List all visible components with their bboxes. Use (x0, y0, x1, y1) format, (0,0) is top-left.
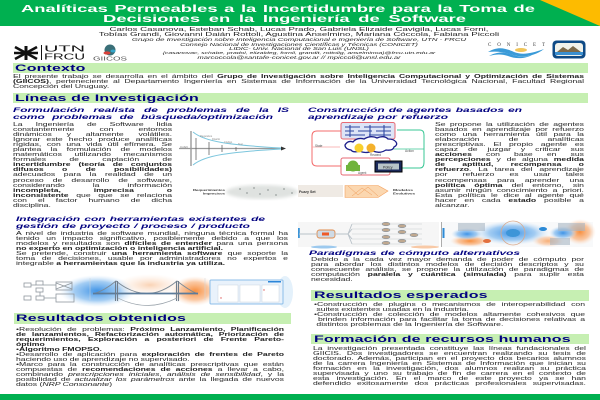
subheading: agentes (308, 107, 522, 121)
text: paradigmas: computación paralela y cuántica (simulada) para suplir esta (311, 272, 584, 278)
text: integración: no experto en optimización o inteligencia artificial. (16, 246, 223, 252)
heading: Formación de recursos humanos: Formación de recursos humanos (314, 334, 570, 344)
chart: cone of uncertainty (179, 131, 286, 166)
subheading: integración (16, 216, 265, 230)
text: formación: esta investigación. En el marco de este proyecto ya se han (313, 376, 586, 382)
illustration: abstract computing (441, 220, 595, 247)
chart: cone of uncertainty: Requisitos (200, 134, 213, 138)
illustration: bridge between models and software tool (24, 276, 293, 308)
title text: Analíticas Permeables a la Incertidumbre para la Toma de (21, 3, 535, 15)
figure: imprecise requirements (193, 184, 298, 200)
text: agentes: como una herramienta útil para la (435, 132, 584, 138)
diagram: reinforcement learning: State (315, 144, 323, 148)
list: resultados obtenidos: requerimientos, Exploración a posteriori de Frente Pareto- (16, 337, 284, 343)
logo: GIICOS: GIICOS (93, 56, 128, 62)
text: formulación: inconsistente que que se relaciona (13, 193, 172, 199)
logo: CONICET (488, 42, 545, 58)
authors and affiliations: Carlos Casanova, Esteban Schab, Lucas Prado, Gabriela Elizaide Cavigila, Lucas Forni, (110, 26, 488, 32)
text: contexto: El presente trabajo se desarrolla en el ámbito del Grupo de Investigación sobre Inteligencia Computacional y Optimización de Sistemas (13, 74, 584, 80)
text: agentes: hacer en cada estado posible a (435, 198, 584, 204)
authors and affiliations (98, 26, 499, 60)
text: formulación: adecuados para la realidad de un (13, 172, 172, 178)
footer band (0, 394, 600, 400)
text: paradigmas (311, 257, 584, 283)
text: agentes: Se propone la utilización de agentes (435, 122, 584, 128)
chart: cone of uncertainty: Diseño (212, 137, 221, 141)
list: resultados obtenidos: combinando prescripciones iniciales, análisis de sensibilidad, y la (16, 372, 284, 378)
text: agentes: asumir ningún conocimiento a priori. (435, 188, 584, 194)
logo: UTN FRCU (14, 44, 86, 62)
subheading: formulación (13, 107, 289, 121)
text: contexto: (GIICOS), perteneciente al Departamento Ingeniería en Sistemas de Información de la Universidad Tecnológica Nacional, Facultad Regional (13, 79, 584, 85)
list: resultados esperados: •Construcción de colección de modelos altamente cohesivos que (314, 312, 585, 318)
text: formulación: formales de captación de (13, 157, 172, 163)
heading: Resultados esperados: Resultados esperados (314, 290, 487, 301)
diagram: reinforcement learning: Reward (370, 153, 381, 157)
text: agentes: Esta política le dice al agente qué (435, 193, 584, 199)
authors and affiliations: LIDIC- Univ. Nacional de San Luis (UNSL) (229, 46, 369, 51)
text: formación: doctorado. Además, participan en el proyecto dos becarios alumnos (313, 356, 586, 362)
text: integración: A nivel de industria de software mundial, ninguna técnica formal ha (16, 230, 288, 236)
text: formulación: considerando la información (13, 183, 172, 189)
text: formación (313, 346, 586, 387)
list: resultados esperados (314, 302, 586, 328)
text: paradigmas: Debido a la cada vez mayor demanda de poder de cómputo por (311, 257, 584, 263)
authors and affiliations: Consejo Nacional de Investigaciones Científicas y Técnicas (CONICET) (180, 42, 418, 47)
text: formulación: difusos o de posibilidades) (13, 167, 172, 173)
list: resultados esperados: •Construcción de plugins o mecanismos de interoperabilidad con (314, 302, 585, 308)
list: resultados obtenidos: haciendo uso de aprendizaje no supervisado. (16, 357, 190, 363)
text: agentes: por refuerzo es usar tales (435, 172, 584, 178)
logo: CONICET: CONICET (488, 43, 545, 48)
text: agentes: capaz de juzgar y criticar sus (435, 147, 584, 153)
list: resultados obtenidos: de lanzamientos, Refactorización automática, Priorización de (16, 332, 284, 338)
figure: imprecise requirements: Requerimientos (193, 188, 226, 192)
text: contexto (13, 74, 584, 90)
list: resultados obtenidos (16, 326, 284, 388)
text: formación: de la carrera Ingeniería en Sistemas de Información que inician su (313, 361, 586, 367)
list: resultados esperados: distintos problemas de la Ingeniería de Software. (316, 322, 503, 328)
figure: fuzzy set to model: Evolutivos (393, 192, 416, 196)
text: formulación: Ignorar este hecho produce analíticas (13, 137, 172, 143)
section bar: Resultados esperados (311, 290, 589, 300)
subheading: integración: gestión de proyecto / proceso / producto (16, 223, 250, 230)
text: agentes: de aptitud, recompensa o (435, 162, 584, 168)
text: paradigmas: para abordar los distintos modelos de decisión descriptos y su (311, 262, 584, 268)
diagram: reinforcement learning (312, 122, 424, 176)
text: contexto: Concepción del Uruguay. (13, 84, 109, 90)
text: agentes (435, 122, 584, 209)
title text (21, 3, 535, 25)
authors and affiliations: Tobías Grandi, Giovanni Daián Rottoli, Agustina Anselmino, Mariana Cóccola, Fabiana Piccoli (99, 32, 499, 38)
text: agentes: política óptima del entorno, sin (435, 183, 584, 189)
text: formulación: rígidas, con una vida útil efímera. Se (13, 142, 172, 148)
section bar: Contexto (13, 63, 588, 73)
chart: cone of uncertainty: Cúbrit (180, 145, 188, 149)
text: agentes: elaboración de analíticas (435, 137, 584, 143)
text: formación: defendido exitosamente dos prácticas profesionales supervisadas. (313, 381, 586, 387)
title banner (0, 0, 600, 26)
subheading: integración: Integración con herramientas existentes de (16, 216, 265, 223)
logo: UTN FRCU: FRCU (44, 52, 85, 62)
authors and affiliations: marcoccola@santafe-conicet.gov.ar // mpiccoli@unsl.edu.ar (197, 55, 401, 60)
text: integración: integrable a herramientas que la industria ya utiliza. (16, 261, 225, 267)
section bar: Líneas de Investigación (13, 93, 588, 103)
text: formulación: disciplina. (13, 203, 51, 209)
subheading: formulación: Formulación realista de problemas de la IS (13, 107, 289, 114)
subheading: agentes: Construcción de agentes basados en (308, 107, 522, 114)
text: formulación (13, 122, 172, 209)
list: resultados obtenidos: •Resolución de problemas: Próximo Lanzamiento, Planificación (16, 326, 284, 332)
text: integración (16, 230, 288, 267)
text: paradigmas: consecuente análisis, se propone la utilización de paradigmas de (311, 267, 584, 273)
section bar: Resultados obtenidos (14, 313, 291, 324)
figure: fuzzy set to model: Modelos (393, 188, 414, 192)
diagram: reinforcement learning: Policy (383, 166, 393, 170)
text: agentes: refuerzo. La tarea del aprendizaje (435, 167, 584, 173)
text: agentes: alcanzar. (435, 203, 470, 209)
text: formulación: dinámicos y altamente volátiles. (13, 132, 172, 138)
text: formulación: incompleta, imprecisa o (13, 188, 172, 194)
chart: cone of uncertainty: Código (224, 140, 233, 144)
text: agentes: recompensas para aprender una (435, 178, 584, 184)
chart: cone of uncertainty: Test (238, 142, 243, 146)
subheading: formulación: como problemas de búsqueda/optimización (13, 114, 273, 121)
text: formulación: La Ingeniería de Software lidia (13, 122, 172, 128)
list: resultados esperados: suites existentes usadas en la industria. (316, 307, 469, 313)
text: integración: tenido un impacto significativo, posiblemente debido a que los (16, 236, 288, 242)
section bar: Formación de recursos humanos (311, 334, 589, 344)
text: integración: toma de decisiones, usable por administradores no expertos e (16, 256, 288, 262)
text: formulación: incertidumbre (teoría de conjuntos (13, 162, 172, 168)
logo: GIICOS (93, 44, 128, 62)
heading: Líneas de Investigación: Líneas de Investigación (15, 92, 199, 104)
list: resultados obtenidos: óptimo (16, 342, 45, 348)
list: resultados obtenidos: •Desarrollo de aplicación para exploración de frentes de Pareto (16, 352, 284, 358)
diagram: reinforcement learning: Action (405, 149, 414, 153)
text: formación: La investigación presentada constituye las líneas fundacionales del (313, 346, 586, 352)
text: agentes: acciones con base en sus (435, 152, 584, 158)
text: agentes: prescriptivas. El propio agente es (435, 142, 584, 148)
subheading: agentes: aprendizaje por refuerzo (308, 114, 448, 121)
heading: Resultados obtenidos: Resultados obtenidos (16, 313, 186, 324)
list: resultados obtenidos: •Marco para la construcción de analíticas prescriptivas que están (16, 362, 284, 368)
text: formación: GIICIS. Dos investigadores se encuentran realizando su tesis de (313, 351, 586, 357)
text: formulación: constantemente con entornos (13, 127, 172, 133)
text: integración: modelos y resultados son difíciles de entender para una persona (16, 241, 288, 247)
figure: imprecise requirements: Imprecisos (203, 192, 226, 196)
text: formación: supervisada y uno su trabajo de fin de carrera en el contexto de (313, 371, 586, 377)
text: agentes: percepciones y de alguna medida (435, 157, 584, 163)
text: formulación: plantea la formulación de modelos (13, 147, 172, 153)
logo: university crest (552, 40, 586, 58)
text: formulación: proceso de desarrollo de software, (13, 178, 172, 184)
text: formulación: matemáticos utilizando mecanismos (13, 152, 172, 158)
text: integración: Se pretende, construir una herramienta software que soporte la (16, 251, 288, 257)
illustration: decision tree (298, 222, 439, 248)
list: resultados obtenidos: compuestas de recomendaciones de acciones a llevar a cabo, (16, 367, 284, 373)
text: formación: formación en la investigación, dos alumnos realizan su práctica (313, 366, 586, 372)
text: paradigmas: necesidad. (311, 277, 353, 283)
logo: UTN FRCU: UTN (44, 44, 86, 54)
title text: Decisiones en la Ingeniería de Software (103, 13, 466, 25)
figure: fuzzy set to model: Fuzzy Set (299, 190, 316, 194)
list: resultados obtenidos: posibilidad de actualizar los parámetros ante la llegada de nuevos (16, 377, 284, 383)
figure: fuzzy set to model (298, 185, 416, 198)
authors and affiliations: Grupo de Investigación sobre Inteligencia Computacional e Ingeniería de Software, UTN - FRCU (132, 37, 466, 42)
authors and affiliations: {casanovac, schabe, pradol, elizaldeg, fornil, grandit, rottolig, anselminoa}@frcu.utn.edu.ar (163, 50, 435, 55)
subheading: paradigmas: Paradigmas de cómputo alternativos (309, 250, 520, 256)
list: resultados obtenidos: •Algoritmo FMOPSO. (16, 347, 102, 353)
text: formulación: con el factor humano de dicha (13, 198, 172, 204)
corner accent (540, 0, 600, 26)
diagram: reinforcement learning: Agent (358, 171, 366, 175)
heading: Contexto: Contexto (15, 62, 86, 74)
list: resultados obtenidos: datos (NRP Consonante) (16, 382, 112, 388)
text: agentes: basados en aprendizaje por refuerzo (435, 127, 584, 133)
list: resultados esperados: brinden información para facilitar la toma de decisiones relativas a (318, 317, 585, 323)
